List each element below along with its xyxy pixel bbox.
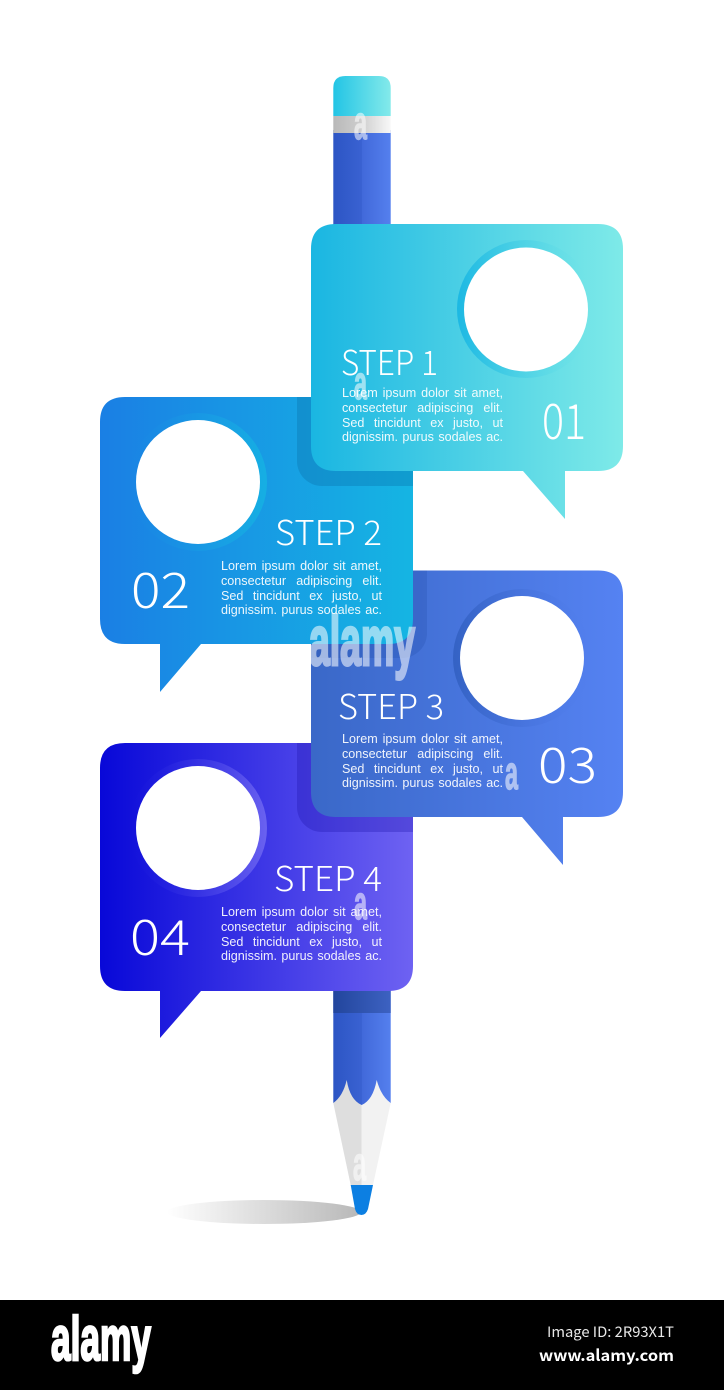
bubble 4 [100,743,413,1038]
pencil wood tip [333,1076,391,1185]
body text 4: consectetur adipiscing elit. [221,920,382,934]
body text 4: dignissim. purus sodales ac. [221,949,382,963]
watermark a, step 1: a [354,356,367,409]
shadow from bubble 3 [297,743,413,832]
body text 4: Lorem ipsum dolor sit amet, [221,905,382,919]
panel: step 3 [311,570,623,865]
panel: step 4 [100,743,413,1038]
image placeholder 2 [129,413,267,551]
image placeholder 1 [457,240,595,378]
body text 3: consectetur adipiscing elit. [342,747,503,761]
watermark a, step 4: a [354,876,367,929]
pencil [333,76,391,1215]
body text 1: Sed tincidunt ex justo, ut [342,416,503,430]
body text 3 [342,732,504,794]
footer bar [0,1300,724,1390]
footer logo: alamy [51,1305,151,1374]
body text 4 [221,905,383,967]
shadow from bubble 2 [316,570,427,658]
body text 2: dignissim. purus sodales ac. [221,603,382,617]
shadow from bubble 1 [297,397,413,486]
pencil lead [351,1185,373,1215]
body text 2 [221,559,383,621]
number 01: 01 [542,383,586,454]
pencil body [333,130,391,1105]
body text 3: Lorem ipsum dolor sit amet, [342,732,503,746]
watermarks [309,96,518,1190]
watermark a, pencil tip: a [353,1137,366,1190]
number 04: 04 [130,899,190,970]
heading: step 3: STEP 3 [338,680,444,729]
heading: step 1: STEP 1 [341,336,438,385]
body text 1: Lorem ipsum dolor sit amet, [342,386,503,400]
bubble 3 [311,570,623,865]
body text 1 [342,386,504,448]
number 03: 03 [538,727,597,798]
body text 3: Sed tincidunt ex justo, ut [342,762,503,776]
website: www.alamy.com [539,1344,674,1366]
watermark a, eraser: a [354,96,367,149]
pencil cast shadow band [333,990,391,1013]
body text 3: dignissim. purus sodales ac. [342,776,503,790]
watermark a, step 3: a [505,746,518,799]
body text 2: Sed tincidunt ex justo, ut [221,588,382,602]
body text 1: consectetur adipiscing elit. [342,401,503,415]
image placeholder 3 [453,589,591,727]
pencil eraser [333,76,391,116]
pencil ferrule band [333,116,391,133]
bubble 1 [311,224,623,519]
body text 1: dignissim. purus sodales ac. [342,430,503,444]
panel: step 1 [311,224,623,519]
image placeholder 4 [129,759,267,897]
body text 2: consectetur adipiscing elit. [221,574,382,588]
bubble 2 [100,397,413,692]
panel: step 2 [100,397,413,692]
body text 4: Sed tincidunt ex justo, ut [221,934,382,948]
image id: Image ID: 2R93X1T [547,1321,674,1342]
watermark logo: alamy [309,602,415,680]
number 02: 02 [131,552,190,623]
ground shadow [167,1200,361,1224]
heading: step 2: STEP 2 [275,506,382,555]
heading: step 4: STEP 4 [274,852,382,901]
body text 2: Lorem ipsum dolor sit amet, [221,559,382,573]
